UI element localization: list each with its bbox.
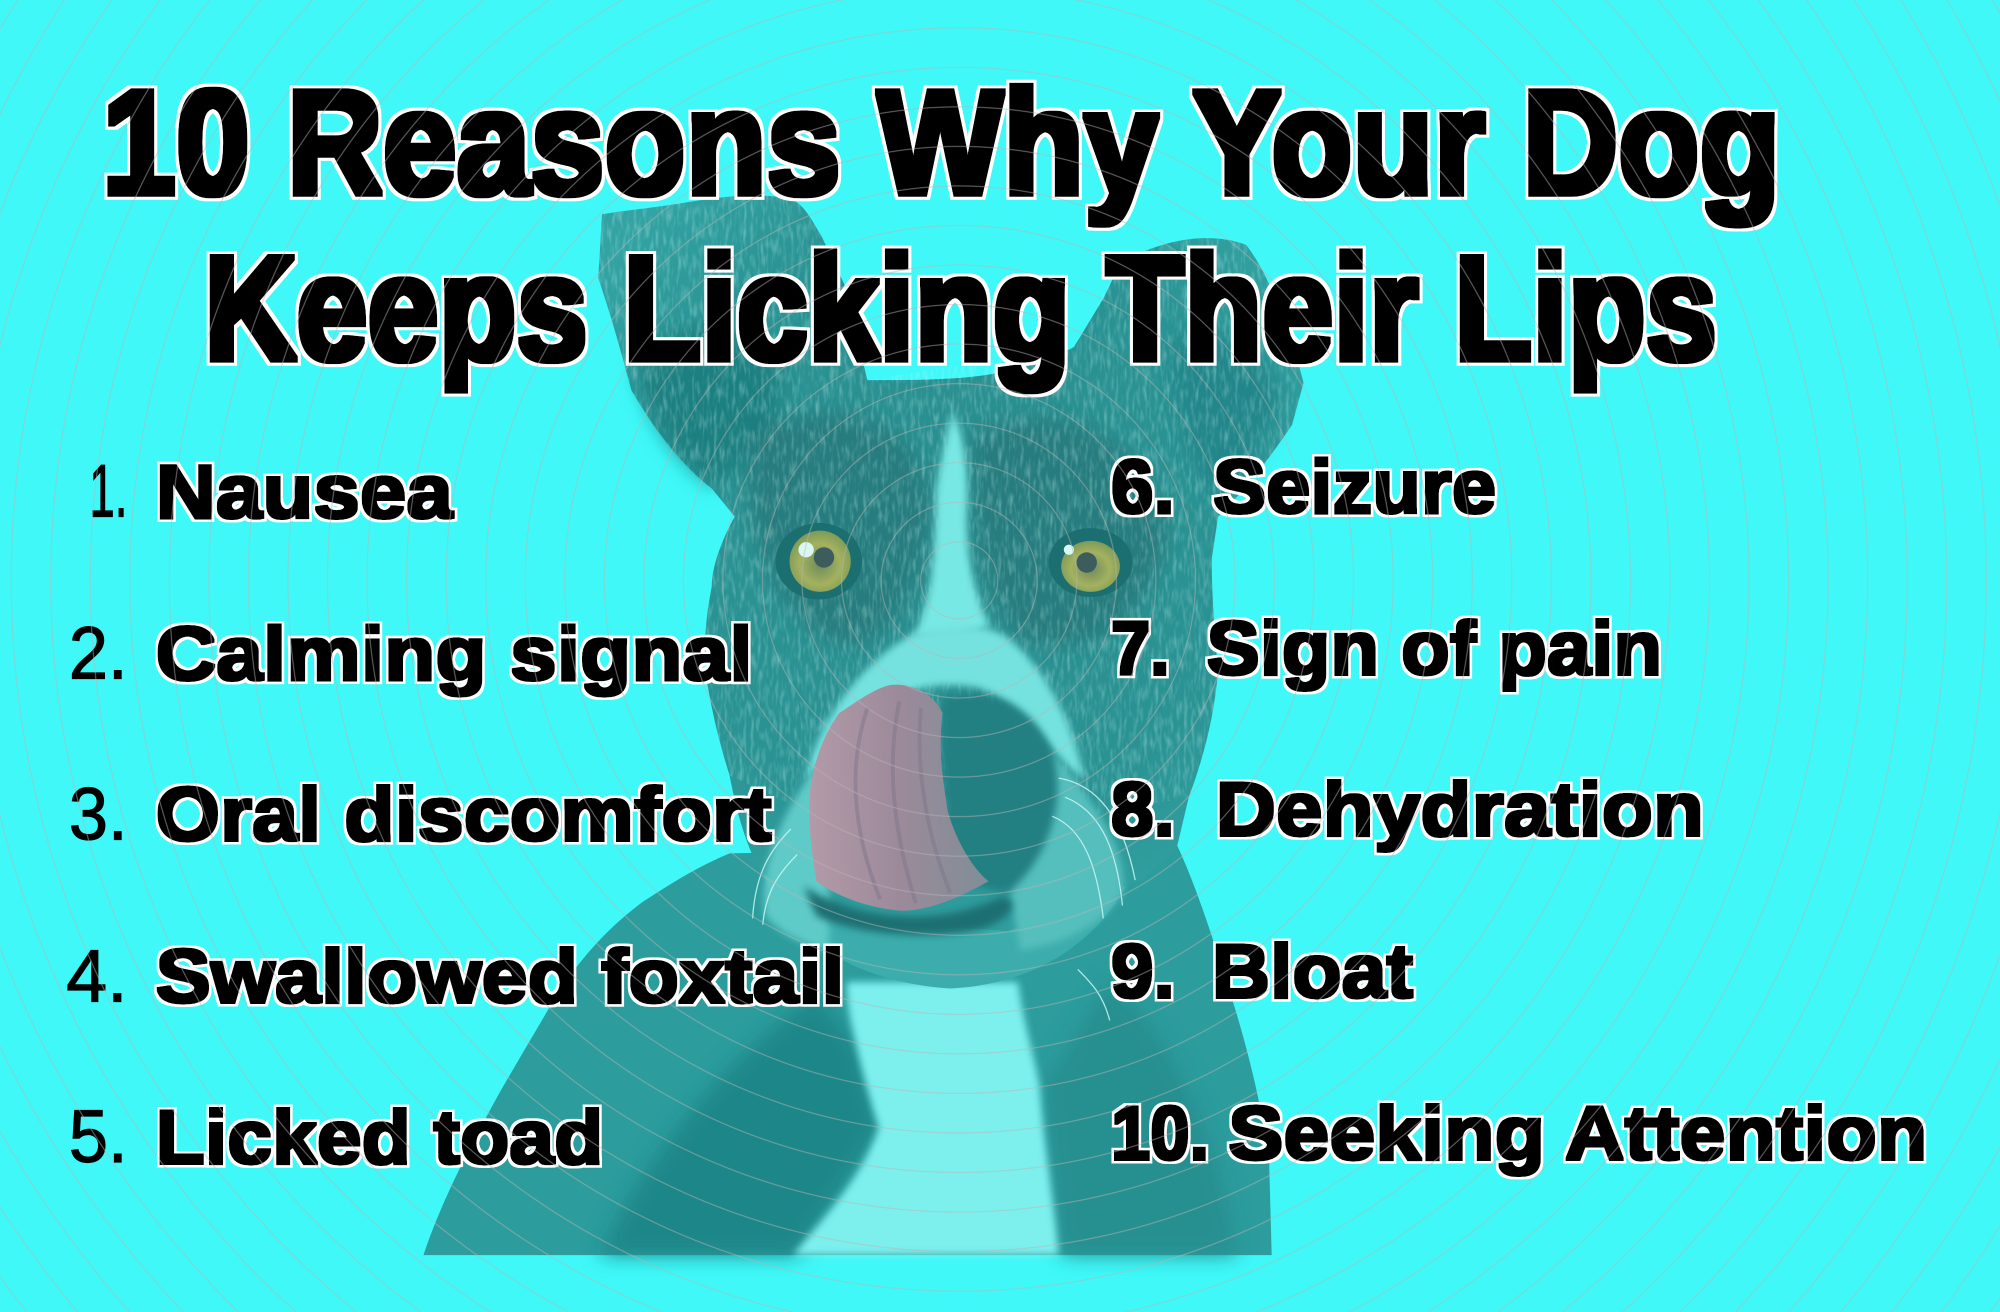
left column numbers: 3. (69, 772, 128, 855)
reason 8: Dehydration (1216, 767, 1704, 852)
reason 7: 7. (1111, 607, 1170, 692)
left column numbers (66, 450, 128, 1178)
dog head and ears (598, 195, 1304, 931)
tongue (809, 685, 989, 911)
reason 6: 6. (1111, 445, 1175, 530)
reason 1: Nausea (156, 450, 454, 535)
left column reasons (156, 450, 844, 1180)
muzzle highlight (806, 627, 1084, 778)
nose (941, 693, 1057, 893)
reason 9: 9. (1111, 929, 1175, 1014)
right column reasons (1111, 445, 1927, 1176)
whiskers (753, 778, 1135, 1020)
reason 5: Licked toad (156, 1095, 603, 1180)
reason 6: Seizure (1213, 445, 1496, 530)
chin (760, 829, 1129, 989)
left eye (776, 523, 862, 599)
reason 7: Sign of pain (1207, 607, 1662, 692)
left column numbers: 2. (69, 612, 128, 695)
title line 1: 10 Reasons Why Your Dog (102, 59, 1781, 226)
reason 10: Seeking Attention (1228, 1091, 1927, 1176)
ear shading (638, 327, 1282, 646)
reason 4: Swallowed foxtail (156, 935, 844, 1020)
title (102, 59, 1781, 392)
reason 3: Oral discomfort (156, 773, 772, 858)
left column numbers: 5. (69, 1095, 128, 1178)
reason 8: 8. (1111, 767, 1175, 852)
lip fur (764, 765, 829, 950)
left column numbers: 4. (66, 934, 128, 1017)
reason 9: Bloat (1212, 929, 1413, 1014)
dog chest shadow (599, 982, 1237, 1255)
title line 2: Keeps Licking Their Lips (204, 225, 1717, 392)
right eye (1048, 528, 1133, 597)
white blaze (913, 411, 990, 637)
mouth (804, 886, 1012, 935)
dog body (423, 846, 1272, 1255)
reason 10: 10. (1111, 1091, 1209, 1176)
white chest (793, 982, 1059, 1255)
fur texture (598, 195, 1304, 816)
reason 2: Calming signal (156, 612, 753, 697)
dog photo (423, 195, 1304, 1255)
left column numbers: 1. (89, 450, 128, 533)
